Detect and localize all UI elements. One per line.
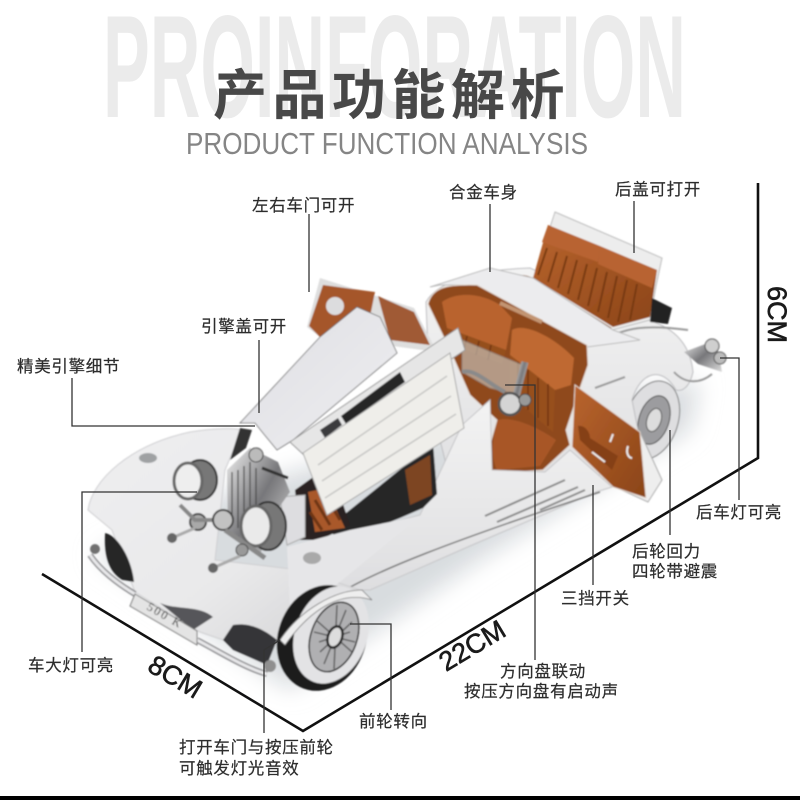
subtitle: PRODUCT FUNCTION ANALYSIS [186, 126, 588, 161]
front dark intake [160, 603, 213, 630]
hood rivet [139, 453, 157, 463]
trunk lid [533, 212, 662, 330]
engine bay [295, 465, 350, 540]
rear body [426, 268, 693, 520]
door opening [325, 443, 437, 540]
label: 精美引擎细节: 精美引擎细节 [17, 357, 120, 376]
label: 三挡开关: 三挡开关 [561, 589, 630, 608]
label: 打开车门与按压前轮: 打开车门与按压前轮 [179, 738, 334, 757]
rear wheel [615, 374, 689, 466]
white strip between seats [430, 268, 640, 347]
rear seat [505, 225, 657, 330]
front wheel arch [280, 590, 372, 645]
rear body chrome trim [595, 327, 712, 388]
dimension: 8CM: 8CM [143, 649, 207, 705]
scissor door panel [303, 353, 464, 515]
label: 前轮转向: 前轮转向 [359, 712, 428, 731]
dimension: 22CM: 22CM [434, 614, 511, 677]
radiator grille [227, 448, 290, 556]
seat cushion [493, 419, 556, 470]
dimension: 6CM: 6CM [762, 286, 792, 343]
hood shadow wedge [230, 428, 252, 460]
bumper bolts [90, 544, 276, 672]
label: 左右车门可开: 左右车门可开 [252, 196, 355, 215]
label: 方向盘联动: 方向盘联动 [500, 662, 586, 681]
right dark intake [223, 624, 277, 665]
bottom black bar [0, 796, 800, 800]
label: 后盖可打开: 后盖可打开 [615, 180, 701, 199]
front cockpit [428, 285, 588, 474]
label: 后轮回力: 后轮回力 [632, 542, 701, 561]
black left grille [105, 533, 134, 582]
headlight left [167, 460, 225, 543]
hood raised [240, 307, 397, 450]
front seat left [442, 295, 512, 364]
ground shadow [95, 380, 700, 690]
steering lamp [462, 362, 531, 415]
front fender pinstripe [345, 492, 600, 590]
label: 合金车身: 合金车身 [449, 183, 518, 202]
title: 产品功能解析 [213, 66, 570, 126]
rear light [684, 339, 726, 372]
label: 车大灯可亮: 车大灯可亮 [28, 656, 114, 675]
bumper chrome [90, 555, 267, 674]
leader lines [72, 201, 739, 733]
dimension lines [42, 183, 758, 731]
label: 可触发灯光音效: 可触发灯光音效 [179, 759, 299, 778]
plate 500 K: 500 K [144, 599, 186, 631]
side strakes [485, 480, 585, 522]
rear seat bracket [650, 298, 672, 324]
windshield [462, 340, 525, 395]
body chrome emblem [500, 303, 542, 322]
front fender top [287, 516, 420, 610]
car [88, 212, 726, 704]
label: 按压方向盘有启动声: 按压方向盘有启动声 [464, 682, 619, 701]
plate 500 K [130, 594, 197, 645]
grille shell [280, 495, 305, 545]
fender rivet [303, 552, 321, 564]
scissor door frame [290, 328, 465, 456]
label: 后车灯可亮: 后车灯可亮 [696, 503, 782, 522]
side body [290, 400, 612, 610]
right open door [572, 385, 662, 502]
front wheel [262, 572, 382, 704]
label: 引擎盖可开: 引擎盖可开 [201, 317, 287, 336]
front hood body [88, 429, 360, 640]
open door upper [307, 278, 437, 352]
label: 四轮带避震: 四轮带避震 [632, 562, 718, 581]
headlight right [208, 502, 286, 573]
front seat right [510, 328, 574, 432]
